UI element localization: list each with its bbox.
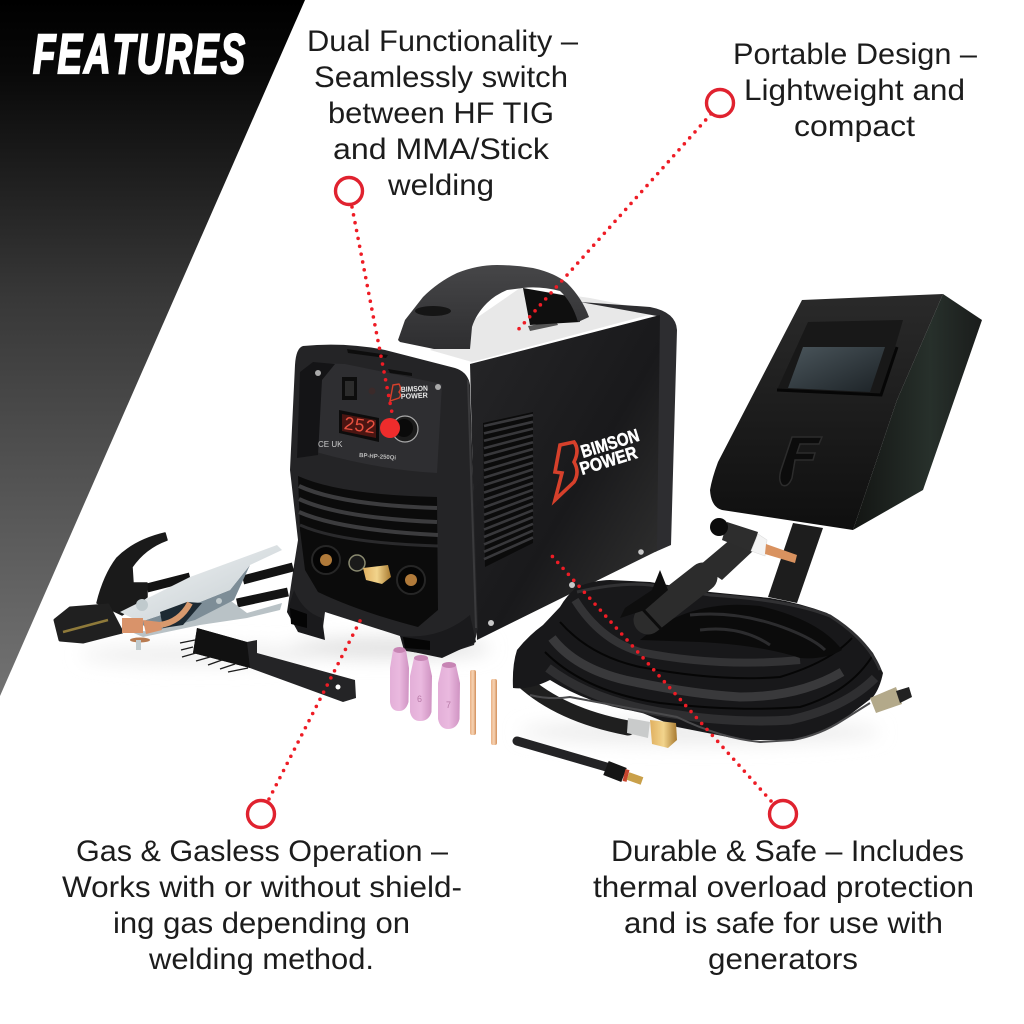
text: Dual Functionality – [307, 25, 578, 58]
handle grip base [523, 288, 580, 325]
jaw insert [63, 620, 108, 632]
callout: durable and safe [552, 556, 974, 976]
text: Portable Design – [733, 38, 977, 71]
text: Lightweight and [744, 74, 965, 107]
leader line [552, 556, 771, 801]
digital display: 252 [342, 413, 377, 439]
mask front face [710, 294, 943, 530]
cable connector [870, 687, 912, 713]
torch back cap [517, 741, 642, 781]
welding mask [710, 294, 982, 603]
window glass [788, 347, 885, 392]
clamp upper plate [120, 545, 282, 622]
front corner highlight [468, 380, 476, 628]
sockets [312, 546, 425, 594]
front frame [287, 345, 478, 656]
torch neck [700, 533, 754, 580]
copper blocks [122, 618, 162, 642]
hose brass nut [650, 720, 677, 748]
machine top surface [430, 288, 660, 362]
back cap [710, 518, 728, 536]
rear frame [580, 302, 677, 552]
text: and is safe for use with [624, 907, 943, 940]
coil centre folds [640, 605, 842, 658]
red knob marker [380, 418, 400, 438]
nozzle 7: 7 [446, 700, 451, 710]
holder jaw [55, 605, 122, 642]
side panel [470, 315, 660, 640]
panel logo [390, 384, 429, 401]
side logo: POWER [577, 442, 640, 479]
panel logo: BIMSON [401, 384, 428, 394]
coil body [513, 580, 883, 740]
text: between HF TIG [328, 97, 554, 130]
tig torch [620, 518, 797, 630]
hose silver ferrule [627, 718, 650, 738]
panel logo: POWER [401, 391, 429, 401]
panel bolts [315, 370, 441, 390]
machine feet [287, 590, 476, 658]
copper tip [765, 544, 797, 563]
leader line [269, 617, 362, 799]
text: Works with or without shield- [62, 871, 462, 904]
electrode holder [55, 533, 167, 642]
compliance marks: CE UK [318, 440, 343, 449]
side logo [555, 425, 642, 500]
front grille and socket recess [298, 476, 438, 627]
dial [392, 416, 418, 442]
ring marker [336, 178, 362, 204]
coil highlights [545, 584, 880, 721]
ring marker [248, 800, 274, 828]
text: thermal overload protection [593, 871, 974, 904]
mask F logo [780, 437, 822, 486]
leader line [352, 207, 393, 418]
gas hose [522, 680, 628, 728]
torch head [722, 522, 758, 552]
left socket [312, 546, 340, 574]
copper braid window [160, 602, 202, 628]
leader line [517, 114, 711, 331]
ceramic collar [751, 534, 767, 556]
carry handle [398, 265, 589, 349]
text: ing gas depending on [113, 907, 410, 940]
pink nozzles [390, 647, 460, 729]
copper collets [470, 670, 497, 745]
clamp steel body [140, 565, 250, 632]
side vent [483, 412, 533, 567]
window frame [777, 320, 903, 395]
text: welding [387, 169, 494, 202]
clamp lower plate [122, 598, 282, 637]
text: Seamlessly switch [314, 61, 568, 94]
earth clamp and electrode holder [55, 533, 356, 702]
floor shadows [80, 638, 880, 744]
thin cable [530, 695, 870, 742]
left bracket [297, 362, 335, 458]
copper braid [160, 603, 190, 625]
text: welding method. [148, 943, 374, 976]
indicator led [368, 388, 376, 394]
mask support handle [768, 523, 823, 603]
text: generators [708, 943, 858, 976]
brass gas fitting [363, 561, 391, 589]
wire brush [180, 628, 356, 702]
text: and MMA/Stick [333, 133, 550, 166]
side screws [488, 549, 644, 626]
torch strap [636, 602, 662, 630]
top slots [347, 349, 412, 376]
text [62, 835, 462, 976]
gas socket [349, 555, 365, 571]
window lower lip [777, 347, 897, 395]
nozzle 6: 6 [417, 694, 422, 704]
right socket [397, 566, 425, 594]
nozzle 5 [390, 647, 409, 711]
handle button [415, 306, 451, 316]
text [733, 38, 977, 143]
title: FEATURES [33, 22, 247, 85]
torch cable coil [513, 580, 912, 748]
text: compact [794, 110, 916, 143]
control panel [297, 362, 442, 473]
ring marker [770, 800, 796, 828]
model number: BP-HP-250Qi [359, 453, 397, 462]
text: Durable & Safe – Includes [611, 835, 964, 868]
callout: dual functionality [307, 25, 578, 418]
top label [528, 321, 558, 331]
cables [147, 567, 293, 603]
black gradient corner banner [0, 0, 305, 696]
side logo: BIMSON [578, 425, 642, 462]
mask side face [853, 294, 982, 530]
welding machine [287, 265, 677, 658]
ring marker [706, 90, 734, 116]
callout: gas and gasless [62, 617, 462, 976]
callout: portable design [517, 38, 977, 331]
text [593, 835, 974, 976]
text [307, 25, 578, 202]
clamp bolts [136, 598, 222, 650]
torch handle [648, 577, 703, 620]
coil fold ridges [690, 614, 825, 650]
power switch [342, 377, 357, 400]
text: Gas & Gasless Operation – [76, 835, 448, 868]
holder handle [97, 533, 167, 615]
torch clip [620, 570, 668, 618]
